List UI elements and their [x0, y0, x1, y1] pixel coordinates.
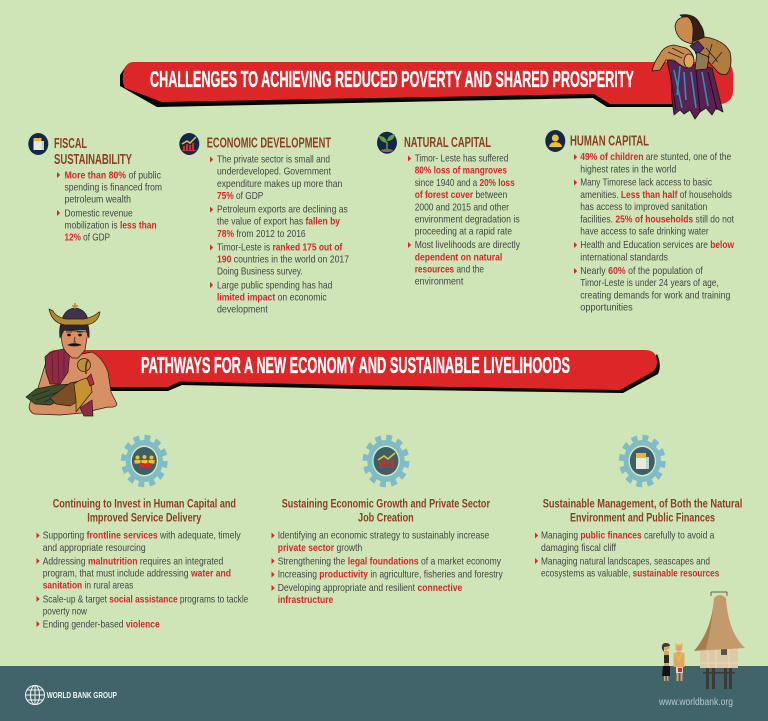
- bullet list: sanitation in rural areas: [43, 581, 133, 592]
- bullet list: 75% of GDP: [217, 191, 263, 202]
- bullet list: The private sector is small and: [217, 155, 330, 166]
- website: www.worldbank.org: [658, 697, 733, 708]
- heading: Continuing to Invest in Human Capital and: [53, 497, 236, 511]
- bullet list: Developing appropriate and resilient connective: [278, 583, 463, 594]
- bullet list: Health and Education services are below: [580, 240, 734, 251]
- logo: World Bank Group: WORLD BANK GROUP: [47, 690, 117, 700]
- heading: [543, 497, 742, 525]
- bullet list: Doing Business survey.: [217, 267, 303, 278]
- heading: [54, 136, 132, 168]
- bullet list: [272, 531, 503, 606]
- bullet list: program, that must include addressing water and: [43, 569, 231, 580]
- column: human capital: [545, 130, 734, 313]
- bullet list: Timor-Leste is under 24 years of age,: [580, 278, 719, 289]
- bullet list: development: [217, 305, 268, 316]
- heading: Improved Service Delivery: [87, 511, 202, 525]
- bullet list: Identifying an economic strategy to sustainably increase: [278, 531, 490, 542]
- heading: [53, 497, 236, 525]
- bullet list: mobilization is less than: [64, 220, 157, 231]
- icon: gear with people: [124, 438, 165, 484]
- icon: person: [545, 130, 565, 152]
- bullet list: 190 countries in the world on 2017: [217, 255, 349, 266]
- bullet list: have access to safe drinking water: [580, 227, 709, 238]
- bullet list: More than 80% of public: [64, 170, 161, 181]
- bullet list: Large public spending has had: [217, 280, 333, 291]
- bullet list: Strengthening the legal foundations of a market economy: [278, 556, 502, 567]
- bullet list: private sector growth: [278, 543, 362, 554]
- column: natural environment and public finances: [535, 438, 742, 580]
- illustration: couple in traditional dress: [662, 643, 684, 681]
- bullet list: Scale-up & target social assistance programs to tackle: [43, 594, 249, 605]
- bullet list: environment degradation is: [415, 215, 520, 226]
- bullet list: resources and the: [415, 265, 484, 276]
- bullet list: Ending gender-based violence: [43, 619, 160, 630]
- bullet list: Domestic revenue: [64, 208, 133, 219]
- bullet list: highest rates in the world: [580, 164, 677, 175]
- icon: gear with calculator: [622, 438, 663, 484]
- bullet list: opportunities: [580, 302, 633, 313]
- column: fiscal sustainability: [28, 133, 162, 243]
- bullet list: damaging fiscal cliff: [541, 543, 616, 554]
- heading: Environment and Public Finances: [570, 511, 715, 525]
- bullet list: spending is financed from: [64, 183, 162, 194]
- bullet list: 78% from 2012 to 2016: [217, 229, 306, 240]
- bullet list: Managing natural landscapes, seascapes and: [541, 556, 710, 567]
- bullet list: and appropriate resourcing: [43, 543, 146, 554]
- bullet list: Timor-Leste is ranked 175 out of: [217, 243, 343, 254]
- heading: Job Creation: [358, 511, 414, 525]
- bullet list: [57, 170, 162, 243]
- bullet list: [574, 152, 734, 313]
- heading: FISCAL: [54, 136, 87, 152]
- bullet list: has access to improved sanitation: [580, 202, 707, 213]
- icon: calculator: [28, 133, 48, 155]
- bullet list: infrastructure: [278, 595, 334, 606]
- bullet list: Supporting frontline services with adequate, timely: [43, 531, 241, 542]
- bullet list: [408, 154, 521, 288]
- bullet list: proceeding at a rapid rate: [415, 227, 512, 238]
- bullet list: international standards: [580, 252, 668, 263]
- bullet list: dependent on natural: [415, 252, 502, 263]
- bullet list: poverty now: [43, 606, 88, 617]
- icon: growth chart: [179, 133, 199, 155]
- bullet list: Nearly 60% of the population of: [580, 266, 703, 277]
- footer band: [0, 666, 768, 721]
- bullet list: Increasing productivity in agriculture, fisheries and forestry: [278, 570, 503, 581]
- bullet list: limited impact on economic: [217, 293, 327, 304]
- bullet list: environment: [415, 277, 463, 288]
- bullet list: of forest cover between: [415, 190, 507, 201]
- woman figure: [662, 643, 670, 681]
- icon: seedling: [377, 132, 397, 154]
- icon: gear with growth chart: [366, 438, 406, 484]
- bullet list: [36, 531, 249, 630]
- bullet list: ecosystems as valuable, sustainable resources: [541, 569, 720, 580]
- bullet list: Many Timorese lack access to basic: [580, 178, 712, 189]
- top banner: [120, 62, 733, 107]
- bullet list: underdeveloped. Government: [217, 167, 331, 178]
- bullet list: [210, 155, 349, 316]
- illustration: man with rooster: [26, 303, 117, 416]
- column: economic growth and private sector jobs: [272, 438, 503, 606]
- second banner: [45, 350, 660, 393]
- column: human capital and service delivery: [36, 438, 249, 630]
- illustration: traditional house: [694, 592, 745, 689]
- bullet list: amenities. Less than half of households: [580, 190, 732, 201]
- bullet list: Timor- Leste has suffered: [415, 154, 509, 165]
- bullet list: [535, 531, 720, 580]
- bullet list: facilities. 25% of households still do not: [580, 214, 734, 225]
- bullet list: 80% loss of mangroves: [415, 166, 507, 177]
- heading: Sustaining Economic Growth and Private Sector: [282, 497, 490, 511]
- logo: World Bank Group: [26, 686, 117, 704]
- column: economic development: [179, 133, 349, 316]
- bullet list: Addressing malnutrition requires an integrated: [43, 556, 224, 567]
- heading: HUMAN CAPITAL: [570, 133, 649, 149]
- bullet list: 12% of GDP: [64, 232, 110, 243]
- bullet list: the value of export has fallen by: [217, 217, 340, 228]
- bullet list: 2000 and 2015 and other: [415, 202, 509, 213]
- heading: NATURAL CAPITAL: [404, 135, 491, 151]
- bullet list: 49% of children are stunted, one of the: [580, 152, 732, 163]
- bullet list: since 1940 and a 20% loss: [415, 178, 515, 189]
- bullet list: Petroleum exports are declining as: [217, 205, 348, 216]
- bullet list: Most livelihoods are directly: [415, 240, 521, 251]
- heading: SUSTAINABILITY: [54, 152, 132, 168]
- bullet list: creating demands for work and training: [580, 290, 731, 301]
- heading: ECONOMIC DEVELOPMENT: [207, 136, 331, 152]
- column: natural capital: [377, 132, 521, 288]
- illustration: woman with drum: [652, 15, 731, 119]
- heading: [282, 497, 490, 525]
- man figure: [674, 643, 684, 681]
- bullet list: expenditure makes up more than: [217, 179, 342, 190]
- bullet list: petroleum wealth: [64, 195, 131, 206]
- bullet list: Managing public finances carefully to avoid a: [541, 531, 715, 542]
